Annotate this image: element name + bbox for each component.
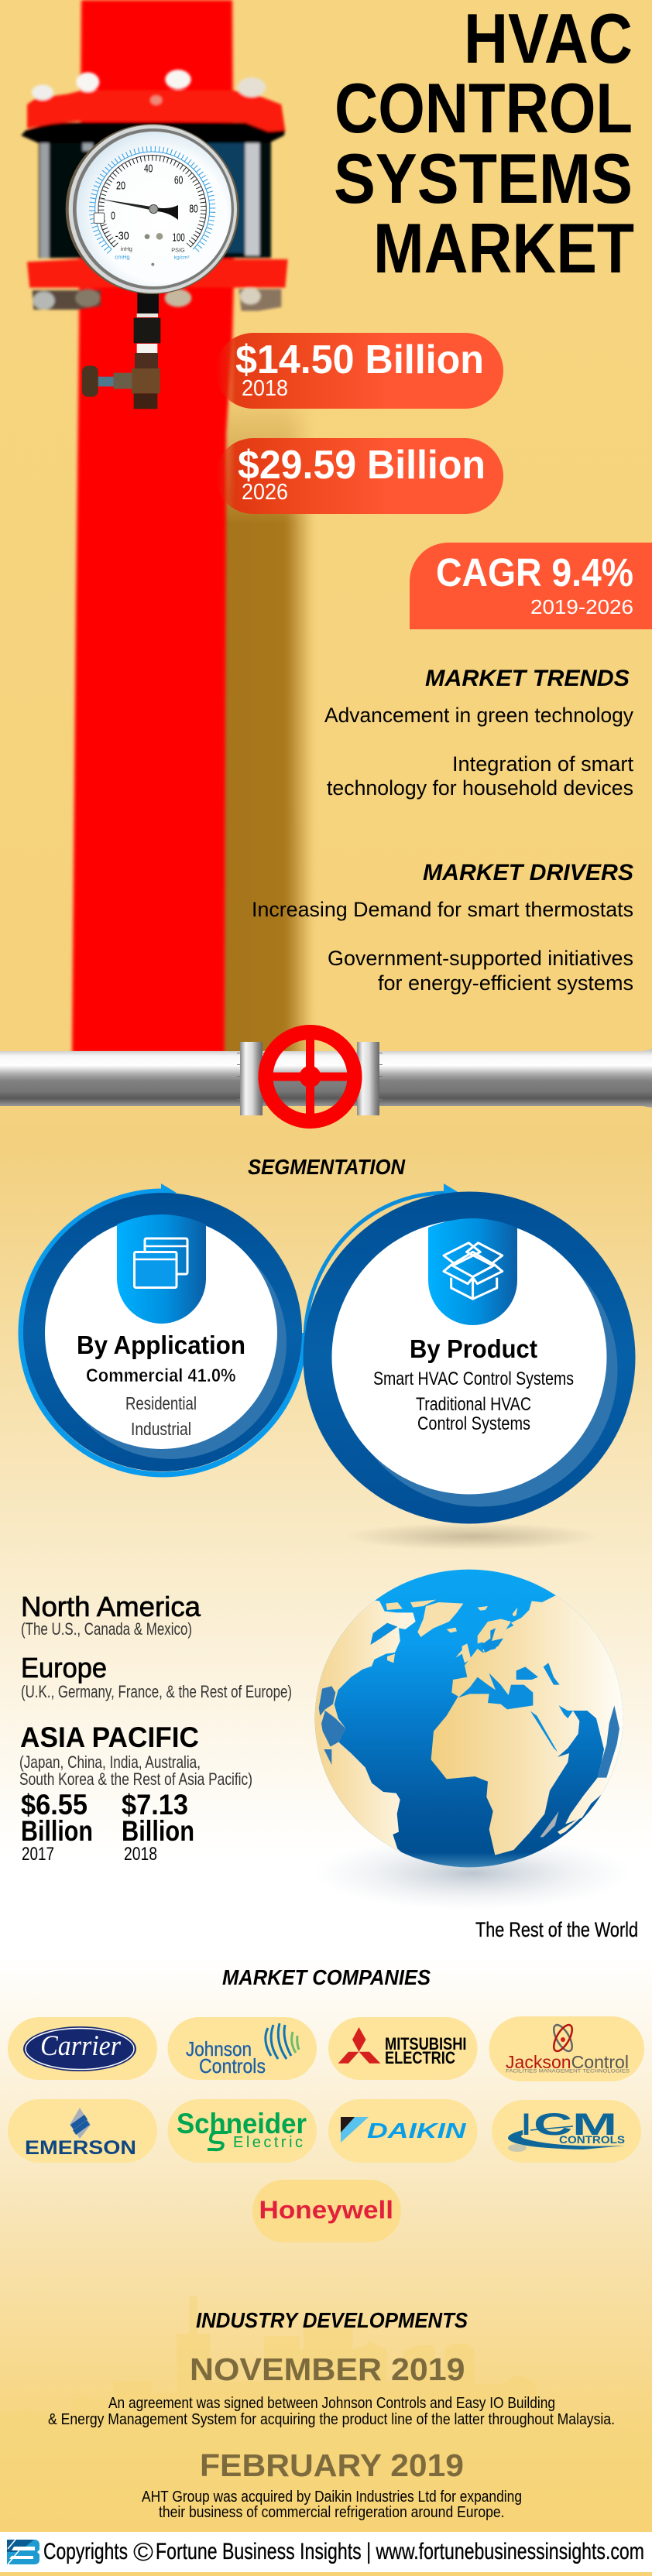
logo: Johnson Controls: Johnson <box>186 2037 252 2060</box>
development: february 2019 <box>142 2448 522 2521</box>
city skyline backdrop <box>0 2297 652 2532</box>
logo: Schneider Electric: Schneider <box>177 2108 307 2139</box>
market trends <box>324 666 633 800</box>
region list: ASIA PACIFIC <box>20 1721 199 1753</box>
logo: Schneider Electric: Electric <box>233 2134 303 2151</box>
by application text: Residential <box>125 1393 197 1413</box>
footer bar: © <box>133 2537 153 2566</box>
development: february 2019: AHT Group was acquired by Daikin Industries Ltd for expanding <box>142 2488 522 2506</box>
title <box>334 0 634 288</box>
by product text <box>373 1334 574 1434</box>
CAGR box: 2019-2026 <box>530 595 633 618</box>
logo: Johnson Controls: Controls <box>199 2054 266 2078</box>
white face <box>45 1217 277 1449</box>
logo: Daikin: DAIKIN <box>367 2119 467 2143</box>
region list <box>19 1591 292 1865</box>
pressure gauge: 0 <box>111 211 115 223</box>
shadow under by product <box>345 1523 600 1550</box>
by product text: Smart HVAC Control Systems <box>373 1368 574 1389</box>
heading: segmentation: SEGMENTATION <box>248 1155 406 1179</box>
icon tab: open box <box>428 1218 517 1325</box>
market drivers: Increasing Demand for smart thermostats <box>252 898 633 921</box>
pressure gauge: 20 <box>116 180 125 193</box>
logo: ICM Controls: CONTROLS <box>559 2133 625 2146</box>
market trends: Advancement in green technology <box>324 704 633 727</box>
market trends: Integration of smart <box>452 752 633 776</box>
thin arc and arrow <box>305 1184 459 1339</box>
logo: ICM Controls: I <box>522 2108 530 2142</box>
right flange <box>355 1042 381 1115</box>
left flange <box>238 1042 264 1115</box>
region list: 2018 <box>124 1844 157 1865</box>
region list: (U.K., Germany, France, & the Rest of Europe) <box>21 1682 292 1701</box>
by product text: By Product <box>410 1334 537 1363</box>
logo: Fortune Business Insights <box>7 2540 39 2564</box>
globe shadow <box>314 1836 631 1910</box>
logo: ICM Controls: CM <box>534 2108 617 2142</box>
pressure gauge: 60 <box>174 175 183 187</box>
logo: Emerson: EMERSON <box>25 2137 136 2159</box>
market trends: MARKET TRENDS <box>425 666 630 691</box>
stat pill: 2026 value <box>215 438 503 514</box>
region list: Europe <box>21 1652 107 1684</box>
region list: 2017 <box>22 1844 54 1865</box>
market drivers: MARKET DRIVERS <box>423 860 633 886</box>
logo: Mitsubishi Electric: MITSUBISHI <box>385 2034 466 2054</box>
stat pill: 2026 value: 2026 <box>242 480 288 505</box>
pressure gauge: 80 <box>189 203 198 215</box>
market drivers: Government-supported initiatives <box>328 947 633 970</box>
pressure gauge: inHg <box>121 245 132 252</box>
gauge assembly in photo coordinates <box>21 70 288 409</box>
pressure gauge: 40 <box>144 163 153 176</box>
region list: Billion <box>122 1815 194 1847</box>
icon tab: windows <box>117 1214 206 1324</box>
logo: Johnson Controls <box>167 2017 317 2080</box>
by application text <box>77 1331 245 1439</box>
pressure gauge: 100 <box>173 231 185 244</box>
heading: market companies: MARKET COMPANIES <box>222 1965 431 1989</box>
development: november 2019: An agreement was signed between Johnson Controls and Easy IO Building <box>108 2394 555 2412</box>
outer light arc and arrow <box>21 1184 304 1475</box>
continents <box>310 1592 630 1869</box>
lighter crescent <box>54 1227 287 1459</box>
white face <box>331 1220 607 1494</box>
logo: ICM Controls <box>492 2100 641 2163</box>
logo: Carrier: Carrier <box>40 2030 122 2062</box>
pressure gauge: kg/cm² <box>174 255 190 261</box>
by product text: Control Systems <box>417 1413 530 1434</box>
market drivers: for energy-efficient systems <box>378 971 633 995</box>
red valve wheel <box>266 1033 355 1121</box>
logo: Jackson Control <box>489 2016 644 2081</box>
region list: (Japan, China, India, Australia, <box>19 1752 201 1772</box>
logo: Carrier <box>8 2017 157 2080</box>
market drivers <box>252 860 633 995</box>
pressure gauge: -30 <box>115 231 129 243</box>
region list: $6.55 <box>21 1789 88 1821</box>
stat pill: 2018 value: 2018 <box>242 376 288 401</box>
logo: Mitsubishi Electric: ELECTRIC <box>385 2048 455 2067</box>
red vertical pipe <box>72 0 234 1053</box>
footer bar: Copyrights <box>43 2539 128 2564</box>
horizontal pipe with valve wheel <box>0 1033 652 1121</box>
development: november 2019 <box>48 2352 615 2428</box>
logo: Daikin <box>328 2099 477 2163</box>
lighter crescent <box>342 1232 618 1506</box>
dark ring <box>23 1193 302 1471</box>
brown pipe shadow <box>221 402 313 1051</box>
market trends: technology for household devices <box>327 776 633 800</box>
stat pill: 2018 value: $14.50 Billion <box>235 337 484 382</box>
photo: red pipe with pressure gauge <box>21 0 314 1057</box>
region list: South Korea & the Rest of Asia Pacific) <box>19 1769 252 1789</box>
logo: Emerson <box>8 2099 157 2163</box>
by application text: Commercial 41.0% <box>86 1365 235 1386</box>
logo: Honeywell: Honeywell <box>259 2196 393 2224</box>
development: february 2019: FEBRUARY 2019 <box>200 2448 464 2483</box>
stat pill: 2026 value: $29.59 Billion <box>238 443 486 488</box>
by application text: By Application <box>77 1331 245 1359</box>
region list: North America <box>21 1591 201 1622</box>
logo: Mitsubishi Electric <box>328 2017 477 2080</box>
pressure gauge <box>66 124 239 294</box>
pressure gauge: cmHg <box>115 253 130 260</box>
flange bodies <box>21 70 288 311</box>
steel pipe <box>0 1049 652 1108</box>
logo: Jackson Control: JacksonControl <box>506 2052 629 2072</box>
development: february 2019: their business of commercial refrigeration around Europe. <box>159 2503 505 2521</box>
region list: $7.13 <box>122 1789 188 1821</box>
CAGR box: CAGR 9.4% <box>436 550 633 594</box>
pressure gauge: PSIG <box>171 247 185 254</box>
dark ring <box>304 1192 635 1523</box>
by application text: Industrial <box>131 1419 191 1439</box>
footer bar <box>0 2532 652 2572</box>
panel: by application <box>21 1184 304 1475</box>
globe <box>310 1570 630 1869</box>
stem and needle valve <box>82 293 160 409</box>
logo: Honeywell <box>252 2180 401 2242</box>
development: november 2019: NOVEMBER 2019 <box>190 2352 465 2387</box>
panel: by product <box>304 1184 635 1523</box>
logo: Jackson Control: FACILITIES MANAGEMENT TECHNOLOGIES <box>506 2070 630 2074</box>
by product text: Traditional HVAC <box>416 1394 531 1415</box>
inland seas <box>370 1623 573 1752</box>
ocean <box>315 1570 623 1867</box>
CAGR box <box>410 543 652 629</box>
logo: Schneider Electric <box>167 2099 317 2163</box>
heading: industry developments: INDUSTRY DEVELOPMENTS <box>196 2308 468 2332</box>
stat pill: 2018 value <box>215 333 503 409</box>
region list: (The U.S., Canada & Mexico) <box>21 1619 192 1639</box>
region list: Billion <box>21 1815 93 1847</box>
